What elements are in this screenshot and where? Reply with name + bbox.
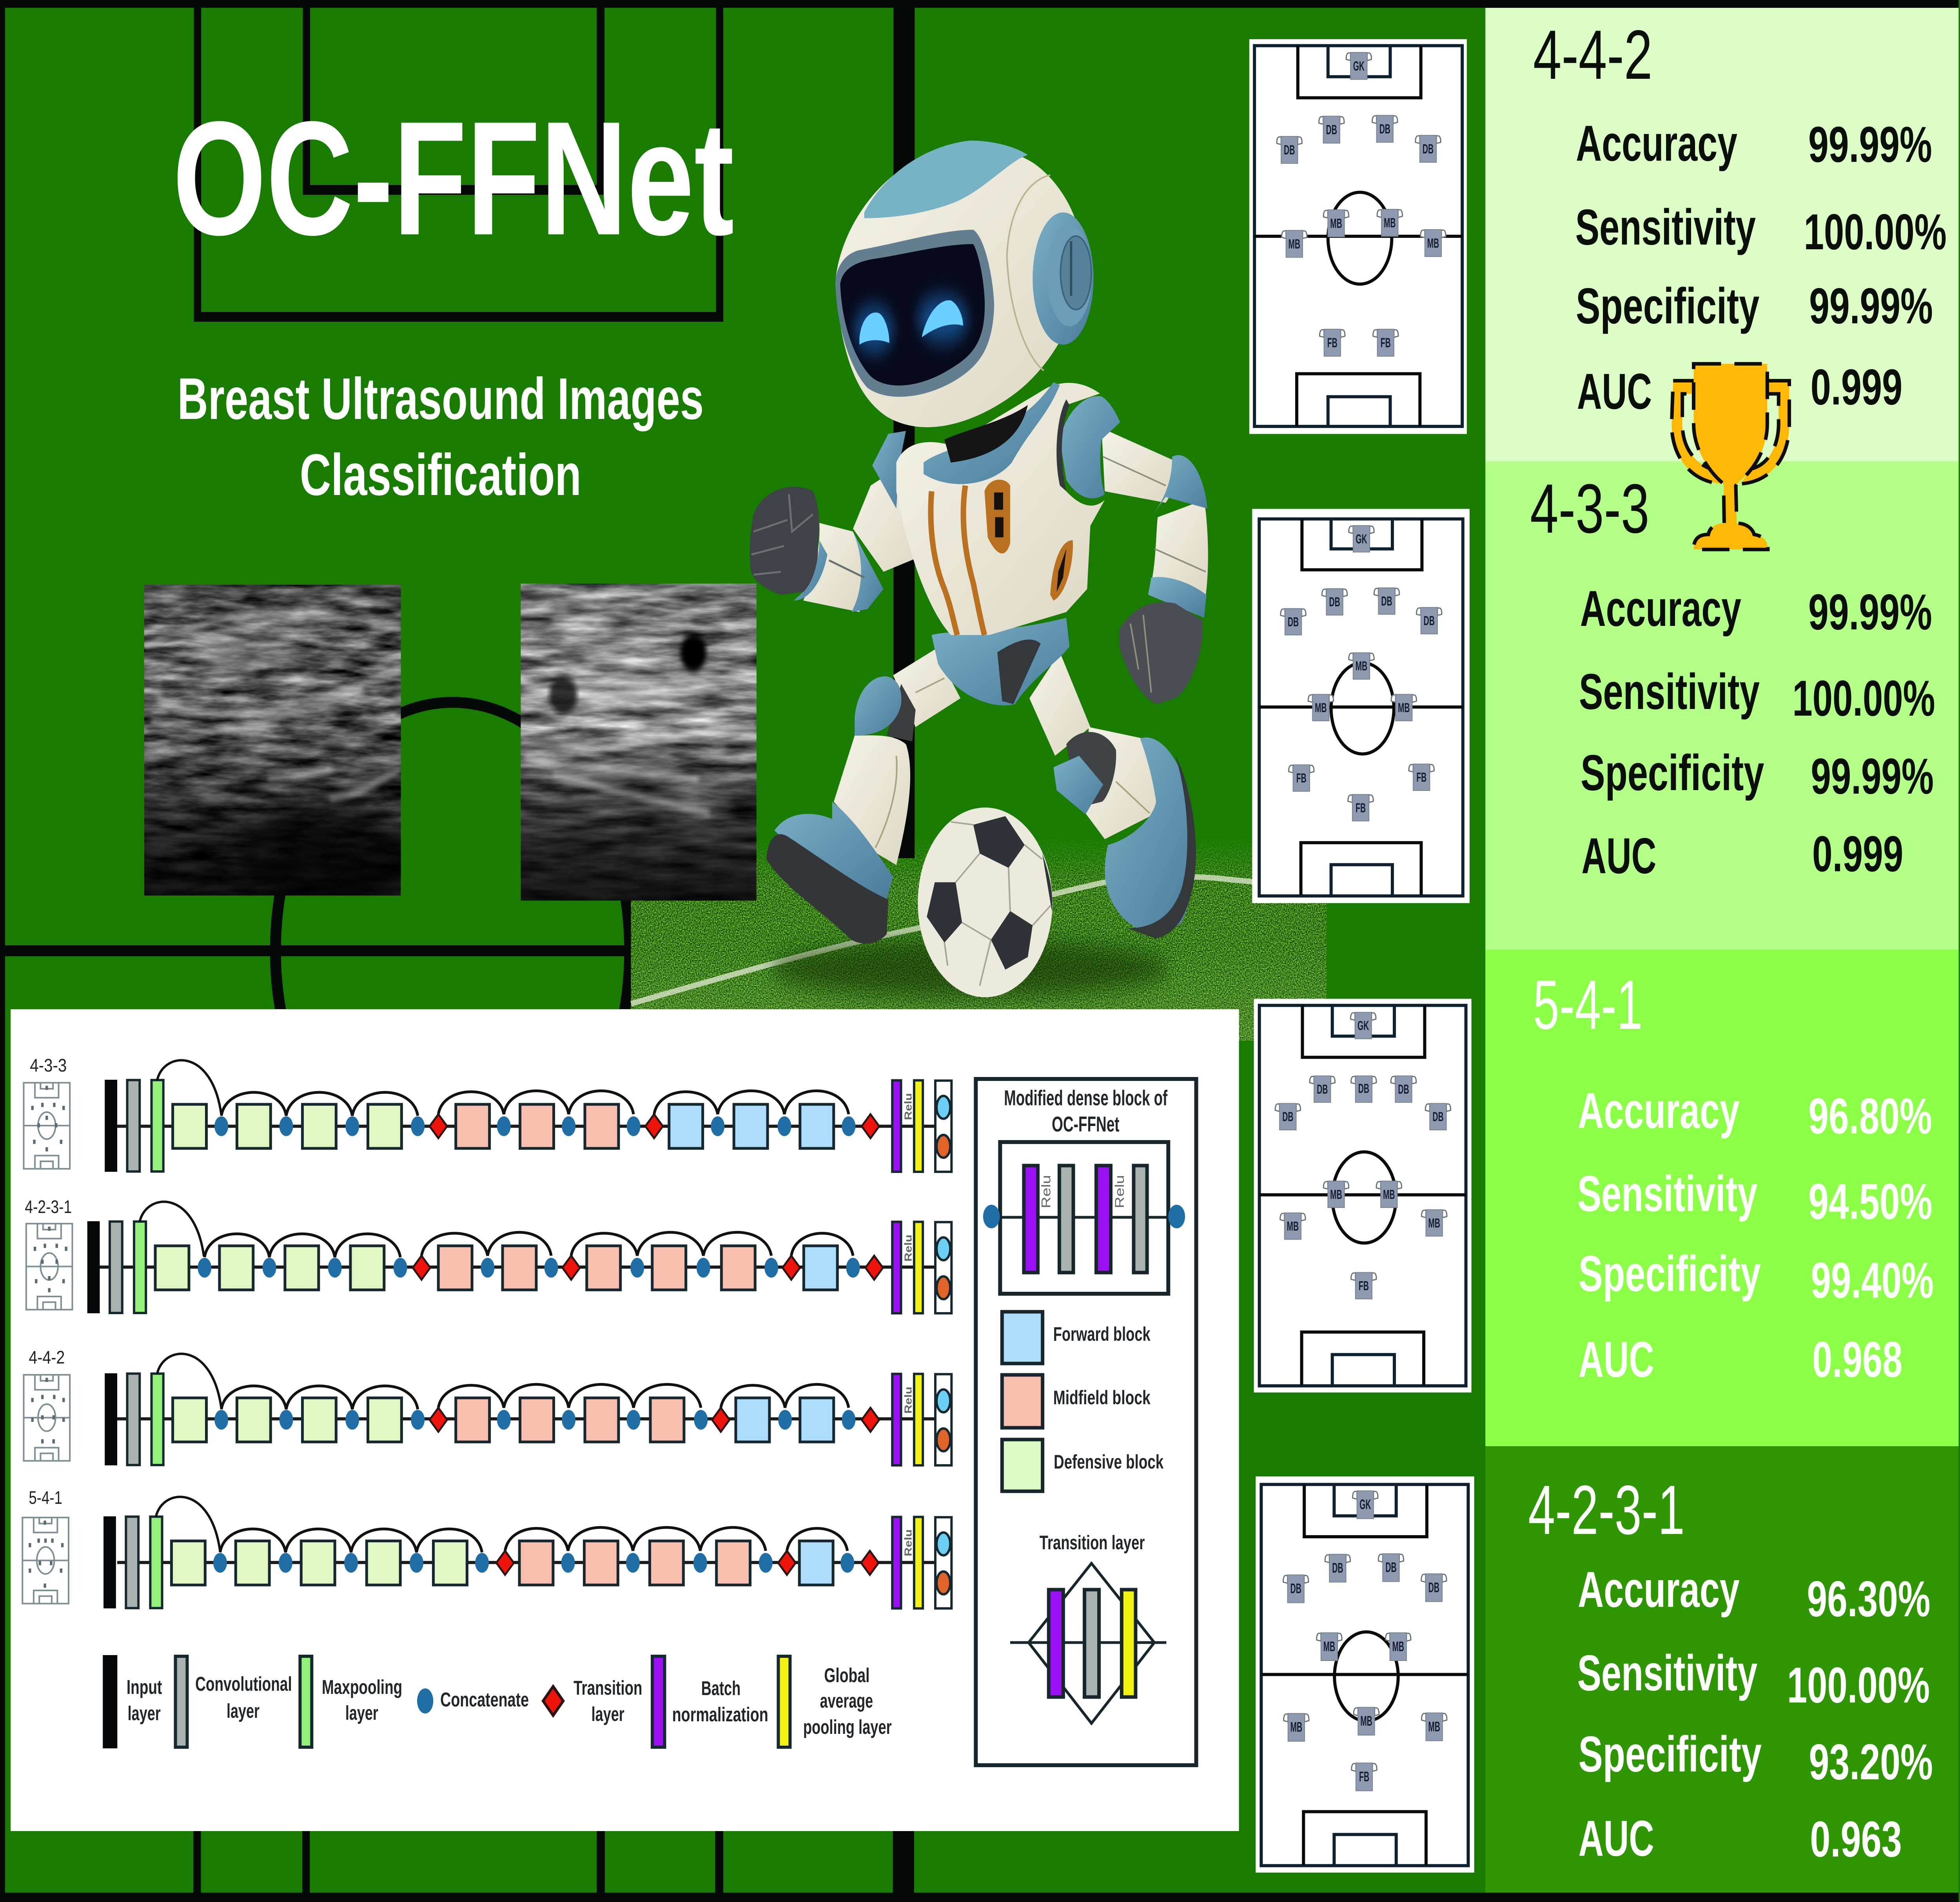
formation field: 4-2-3-1: DB — [1385, 1560, 1397, 1576]
heading 5-4-1: 5-4-1 — [1533, 966, 1642, 1044]
rear leg — [1029, 652, 1196, 939]
results panel: 5-4-1 — [1485, 950, 1958, 1446]
results panel: 4-2-3-1 — [1485, 1446, 1958, 1893]
defensive block key — [1002, 1440, 1164, 1491]
formation field: 4-2-3-1: DB — [1428, 1580, 1439, 1596]
metric: sensitivity: Sensitivity — [1575, 199, 1756, 256]
right arm and fist — [1102, 428, 1208, 704]
metric: accuracy: 96.30% — [1807, 1571, 1930, 1627]
formation field: 4-4-2 — [1249, 39, 1467, 434]
formation field: 4-3-3: FB — [1356, 800, 1366, 815]
metric: AUC: 0.963 — [1810, 1811, 1902, 1868]
formation field: 4-4-2: MB — [1427, 236, 1439, 250]
heading 4-4-2: 4-4-2 — [1533, 16, 1652, 94]
formation field: 4-2-3-1: FB — [1359, 1769, 1369, 1785]
formation field: 4-4-2: MB — [1330, 216, 1342, 231]
forward block key: Forward block — [1053, 1324, 1151, 1345]
head — [835, 141, 1094, 427]
legend: convolutional layer: Convolutional — [195, 1673, 292, 1695]
formation field: 4-3-3: DB — [1381, 594, 1392, 608]
formation field: 4-2-3-1: DB — [1332, 1561, 1343, 1576]
metric: sensitivity: Sensitivity — [1579, 664, 1760, 720]
architecture row: 4-4-2: Relu — [902, 1387, 914, 1414]
formation field: 5-4-1: DB — [1317, 1082, 1328, 1097]
formation field: 4-4-2: FB — [1327, 335, 1338, 350]
grass under the robot — [631, 835, 1327, 1041]
legend: input layer — [103, 1655, 162, 1748]
legend: transition layer: layer — [592, 1703, 624, 1726]
formation field: 4-2-3-1: MB — [1290, 1720, 1302, 1735]
metric: AUC: 0.999 — [1811, 359, 1902, 415]
architecture row: 5-4-1 — [22, 1488, 951, 1608]
metric: accuracy: Accuracy — [1576, 115, 1737, 172]
football — [918, 807, 1053, 997]
metric: accuracy — [1578, 1082, 1932, 1144]
metric: accuracy — [1578, 1561, 1930, 1627]
metric: accuracy: Accuracy — [1580, 580, 1741, 637]
metric: AUC — [1579, 1331, 1902, 1388]
formation field: 5-4-1: MB — [1428, 1215, 1440, 1230]
ultrasound image 2 — [521, 584, 757, 901]
midfield block key: Midfield block — [1053, 1387, 1151, 1409]
formation field: 5-4-1: DB — [1358, 1081, 1369, 1096]
metric: specificity: Specificity — [1579, 1246, 1761, 1302]
architecture row: 4-3-3: 4-3-3 — [30, 1056, 67, 1075]
metric: specificity: Specificity — [1576, 278, 1759, 334]
formation field: 4-2-3-1: MB — [1360, 1713, 1372, 1729]
formation field: 4-2-3-1: DB — [1290, 1581, 1301, 1597]
results panel: 4-3-3 — [1485, 461, 1958, 950]
legend: maxpooling layer: layer — [345, 1702, 378, 1724]
dense block diagram: Relu — [1112, 1175, 1127, 1208]
formation field: 4-4-2: MB — [1289, 236, 1300, 251]
metric: sensitivity — [1577, 1645, 1930, 1713]
legend: global average pooling layer: Global — [824, 1664, 870, 1687]
formation field: 4-2-3-1: MB — [1392, 1639, 1404, 1655]
metric: sensitivity: Sensitivity — [1577, 1166, 1757, 1222]
torso with orange details — [872, 382, 1120, 635]
metric: sensitivity: 100.00% — [1792, 670, 1935, 727]
midfield block key — [1002, 1375, 1151, 1428]
formation field: 5-4-1: MB — [1383, 1187, 1395, 1202]
layer legend — [103, 1655, 892, 1748]
heading 4-3-3: 4-3-3 — [1530, 470, 1650, 548]
formation field: 4-3-3: MB — [1398, 700, 1410, 715]
legend: input layer: layer — [128, 1703, 161, 1725]
formation field: 5-4-1: MB — [1330, 1187, 1342, 1202]
architecture row: 4-4-2 — [24, 1348, 951, 1465]
ultrasound image 1 — [144, 585, 405, 905]
metric: accuracy — [1580, 580, 1932, 640]
formation field: 4-2-3-1: MB — [1428, 1719, 1440, 1735]
metric: specificity — [1579, 1246, 1934, 1309]
architecture row: 4-2-3-1: Relu — [902, 1235, 914, 1262]
legend: convolutional layer: layer — [227, 1700, 260, 1722]
dense block diagram — [983, 1142, 1185, 1294]
formation field: 5-4-1: FB — [1359, 1278, 1369, 1293]
metric: accuracy: Accuracy — [1578, 1561, 1740, 1618]
architecture row: 4-2-3-1: 4-2-3-1 — [25, 1197, 72, 1217]
heading 4-2-3-1: 4-2-3-1 — [1528, 1471, 1685, 1549]
formation field: 4-2-3-1: MB — [1323, 1639, 1335, 1655]
dense block diagram: Relu — [1039, 1175, 1053, 1208]
formation field: 4-4-2: MB — [1384, 215, 1396, 230]
metric: specificity: Specificity — [1579, 1726, 1762, 1782]
legend: maxpooling layer — [300, 1656, 402, 1747]
metric: specificity — [1581, 745, 1934, 805]
legend: global average pooling layer: average — [820, 1690, 873, 1712]
front leg — [766, 649, 960, 943]
legend: batch normalization: normalization — [672, 1704, 768, 1726]
shadow on grass — [771, 940, 1169, 997]
architecture row: 4-4-2: 4-4-2 — [29, 1348, 65, 1367]
metric: specificity — [1579, 1726, 1933, 1790]
architecture row: 4-3-3: Relu — [902, 1093, 914, 1120]
formation field: 4-2-3-1: GK — [1359, 1497, 1371, 1512]
modified dense block legend box — [976, 1079, 1196, 1765]
metric: specificity: 99.99% — [1809, 278, 1933, 334]
metric: AUC: AUC — [1577, 363, 1652, 420]
formation field: 4-4-2: DB — [1423, 141, 1434, 156]
metric: specificity: 99.40% — [1811, 1252, 1934, 1309]
left arm and fist — [750, 462, 925, 612]
subtitle: Classification — [300, 442, 581, 508]
metric: sensitivity — [1575, 199, 1947, 260]
subtitle: Breast Ultrasound Images — [178, 366, 704, 432]
forward block key — [1002, 1312, 1151, 1363]
formation field: 4-3-3: MB — [1315, 700, 1327, 715]
legend: concatenate — [417, 1688, 529, 1713]
formation field: 4-4-2: DB — [1379, 121, 1390, 136]
legend: input layer: Input — [127, 1676, 162, 1699]
formation field: 5-4-1: DB — [1398, 1082, 1409, 1097]
formation field: 4-3-3: FB — [1296, 771, 1307, 785]
formation field: 4-3-3: MB — [1356, 658, 1367, 673]
formation field: 4-4-2: GK — [1353, 58, 1365, 73]
metric: AUC: 0.968 — [1812, 1331, 1902, 1388]
title: OC-FFNet — [172, 88, 734, 269]
metric: AUC — [1579, 1810, 1902, 1868]
formation field: 5-4-1: DB — [1282, 1109, 1293, 1124]
metric: AUC: AUC — [1579, 1331, 1654, 1388]
legend: transition layer — [543, 1677, 642, 1726]
legend box title — [1004, 1086, 1167, 1137]
formation field: 4-3-3: GK — [1356, 531, 1367, 546]
metric: accuracy: 99.99% — [1808, 584, 1932, 640]
metric: sensitivity: Sensitivity — [1577, 1645, 1757, 1701]
legend: maxpooling layer: Maxpooling — [322, 1676, 402, 1699]
metric: accuracy: Accuracy — [1578, 1082, 1740, 1139]
metric: AUC: 0.999 — [1812, 826, 1903, 882]
formation field: 4-4-2: DB — [1284, 142, 1295, 158]
formation field: 5-4-1: MB — [1287, 1218, 1299, 1233]
metric: specificity: 93.20% — [1809, 1734, 1933, 1790]
icon: trophy — [1671, 364, 1789, 549]
formation field: 5-4-1: GK — [1357, 1018, 1369, 1033]
legend: batch normalization — [652, 1656, 768, 1747]
formation field: 4-3-3: FB — [1416, 770, 1426, 785]
metric: specificity — [1576, 278, 1933, 334]
formation field: 4-3-3: DB — [1424, 613, 1435, 628]
formation field: 4-3-3: DB — [1329, 595, 1340, 609]
robot kicking a football — [750, 141, 1208, 997]
metric: specificity: 99.99% — [1811, 748, 1934, 805]
architecture row: 4-2-3-1 — [25, 1197, 951, 1313]
architecture row: 5-4-1: Relu — [902, 1529, 914, 1556]
formation field: 4-4-2: FB — [1381, 335, 1391, 350]
legend: global average pooling layer: pooling layer — [803, 1716, 892, 1739]
formation field: 4-4-2: DB — [1326, 122, 1337, 137]
metric: sensitivity: 100.00% — [1787, 1657, 1930, 1713]
architecture row: 5-4-1: 5-4-1 — [29, 1488, 62, 1508]
metric: accuracy: 96.80% — [1808, 1088, 1932, 1144]
metric: specificity: Specificity — [1581, 745, 1764, 801]
legend: global average pooling layer — [778, 1656, 892, 1747]
metric: AUC — [1577, 359, 1902, 420]
formation field: 4-3-3: DB — [1288, 614, 1299, 629]
legend box title: Modified dense block of — [1004, 1086, 1167, 1110]
metric: accuracy: 99.99% — [1808, 116, 1932, 173]
architecture row: 4-3-3 — [24, 1056, 951, 1172]
formation field: 5-4-1: DB — [1432, 1109, 1444, 1124]
metric: AUC: AUC — [1579, 1810, 1654, 1867]
metric: sensitivity: 100.00% — [1804, 204, 1947, 260]
formation field: 4-3-3 — [1252, 509, 1470, 903]
subtitle — [178, 366, 704, 508]
legend box title: OC-FFNet — [1052, 1113, 1120, 1137]
legend: convolutional layer — [176, 1656, 292, 1747]
metric: sensitivity — [1577, 1166, 1932, 1230]
metric: sensitivity: 94.50% — [1808, 1173, 1932, 1230]
legend: transition layer: Transition — [573, 1677, 642, 1699]
formation field: 4-2-3-1 — [1256, 1476, 1474, 1873]
transition layer diagram — [1010, 1532, 1166, 1723]
formation field: 5-4-1 — [1254, 999, 1472, 1393]
metric: sensitivity — [1579, 664, 1935, 727]
architecture panel — [11, 1009, 1239, 1831]
metric: AUC: AUC — [1581, 828, 1656, 884]
defensive block key: Defensive block — [1054, 1451, 1164, 1473]
pelvis — [932, 618, 1069, 705]
transition layer diagram: Transition layer — [1040, 1532, 1145, 1554]
metric: accuracy — [1576, 115, 1932, 173]
legend: concatenate: Concatenate — [440, 1689, 529, 1711]
legend: batch normalization: Batch — [701, 1677, 740, 1700]
metric: AUC — [1581, 826, 1903, 884]
results panel: 4-4-2 — [1485, 8, 1958, 461]
